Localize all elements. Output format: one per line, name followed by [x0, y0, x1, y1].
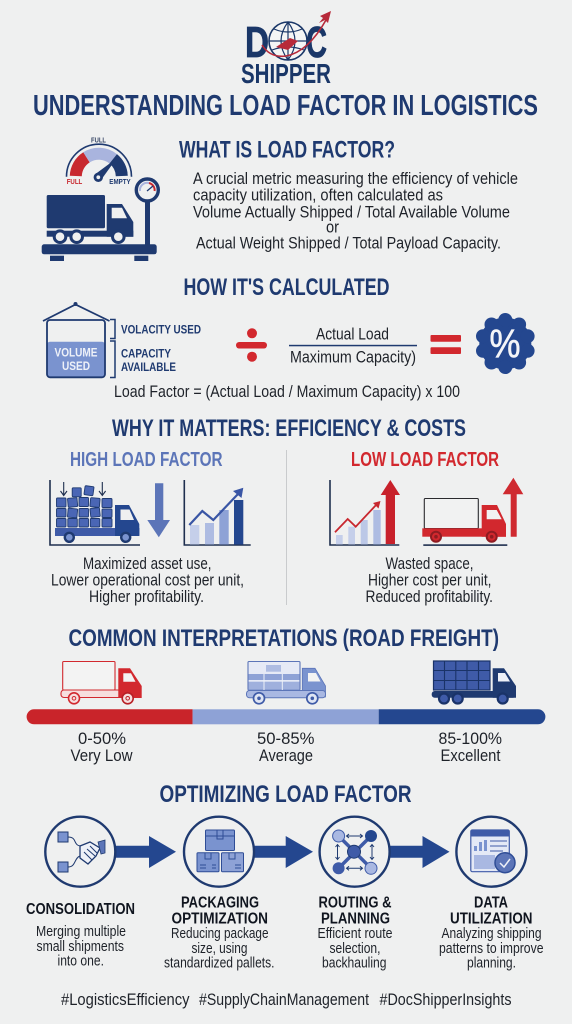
- heading: high load factor: HIGH LOAD FACTOR: [70, 449, 223, 471]
- label: 50-85% average: Average: [259, 746, 313, 765]
- fraction: Actual Load: [316, 326, 389, 344]
- text block: definition: or: [326, 218, 339, 236]
- step: data utilization: patterns to improve: [439, 941, 544, 957]
- label: 0-50% very low: [70, 729, 133, 765]
- heading: low load factor: LOW LOAD FACTOR: [351, 449, 499, 471]
- hashtags: #LogisticsEfficiency: [61, 991, 190, 1009]
- label: 50-85% average: [257, 729, 314, 765]
- gauge: FULL: [91, 136, 106, 144]
- text: low load drawbacks: [366, 555, 493, 606]
- arrow 3: [390, 836, 450, 868]
- label: 50-85% average: 50-85%: [257, 729, 314, 748]
- gauge: FULL: [67, 177, 83, 186]
- step: packaging optimization: Reducing package: [171, 926, 268, 942]
- label: 0-50% very low: Very Low: [70, 746, 133, 765]
- icon: equals sign: [430, 335, 461, 354]
- step: consolidation: into one.: [58, 954, 104, 970]
- hashtags: [61, 991, 512, 1009]
- arrow 1: [115, 836, 176, 868]
- icon: up arrow: [503, 478, 523, 537]
- icon: loaded truck: [50, 480, 140, 545]
- step: routing and planning: ROUTING &: [318, 894, 392, 912]
- text: high load benefits: [51, 555, 244, 606]
- panel: high load factor: [50, 449, 251, 606]
- heading: what is load factor: WHAT IS LOAD FACTOR?: [179, 136, 395, 164]
- icon: fully loaded truck, excellent: [432, 661, 516, 704]
- truck: [47, 195, 133, 242]
- text: low load drawbacks: Wasted space,: [386, 555, 474, 573]
- icon: consolidation handshake: [45, 817, 115, 887]
- icon: packaging boxes: [184, 817, 254, 887]
- text block: definition: [193, 170, 518, 252]
- gauge: EMPTY: [109, 177, 131, 186]
- icon: empty red truck: [422, 498, 507, 546]
- text block: definition: capacity utilization, often calculated as: [193, 186, 443, 204]
- step: data utilization: Analyzing shipping: [442, 926, 542, 942]
- icon: down arrow: [147, 483, 170, 537]
- step: data utilization: [439, 894, 544, 972]
- step: data utilization: DATA: [474, 894, 508, 912]
- icon: volume tank with brackets: AVAILABLE: [121, 360, 176, 374]
- step: data utilization: UTILIZATION: [450, 910, 532, 928]
- icon: volume tank with brackets: USED: [62, 359, 90, 373]
- text block: definition: A crucial metric measuring the efficiency of vehicle: [193, 170, 518, 188]
- label: 0-50% very low: 0-50%: [78, 729, 126, 748]
- logo: DocShipper: [241, 11, 331, 89]
- text: high load benefits: Maximized asset use,: [83, 555, 212, 573]
- text block: definition: Actual Weight Shipped / Total Payload Capacity.: [196, 234, 501, 252]
- chart: rising profitability: [184, 480, 251, 545]
- arrow 2: [254, 836, 313, 868]
- icon: percent badge: [476, 313, 535, 374]
- chart: rising cost: [330, 480, 400, 545]
- step: consolidation: [26, 901, 135, 970]
- step: packaging optimization: OPTIMIZATION: [172, 910, 268, 928]
- text block: definition: Volume Actually Shipped / Total Available Volume: [193, 204, 510, 222]
- text: low load drawbacks: Higher cost per unit,: [368, 572, 492, 590]
- hashtags: #SupplyChainManagement: [199, 991, 369, 1009]
- fraction: Maximum Capacity): [290, 348, 416, 366]
- icon: half-loaded truck, average: [246, 662, 326, 704]
- step: consolidation: CONSOLIDATION: [26, 901, 135, 918]
- text: high load benefits: Lower operational cost per unit,: [51, 572, 244, 590]
- step: routing and planning: Efficient route: [318, 926, 392, 942]
- step: routing and planning: selection,: [330, 941, 380, 957]
- step: consolidation: Merging multiple: [36, 924, 126, 940]
- label: 85-100% excellent: [438, 729, 502, 765]
- icon: routing network: [320, 817, 390, 887]
- hashtags: #DocShipperInsights: [380, 991, 512, 1009]
- step: data utilization: planning.: [467, 956, 516, 972]
- step: packaging optimization: standardized pallets.: [164, 956, 274, 972]
- heading: optimizing load factor: OPTIMIZING LOAD FACTOR: [160, 781, 412, 808]
- icon: red truck, very low: [61, 662, 142, 704]
- logo: DocShipper: D: [245, 18, 269, 67]
- step: packaging optimization: size, using: [192, 941, 248, 957]
- step: packaging optimization: [164, 894, 274, 972]
- icon: volume tank with brackets: CAPACITY: [121, 346, 171, 360]
- logo: DocShipper: SHIPPER: [241, 58, 331, 89]
- panel: low load factor: [330, 449, 523, 606]
- gauge: [66, 136, 132, 186]
- step: routing and planning: backhauling: [322, 956, 386, 972]
- icon: gauge over truck on scale: [42, 136, 158, 261]
- formula: Load Factor = (Actual Load / Maximum Capacity) x 100: [114, 383, 460, 401]
- step: packaging optimization: PACKAGING: [181, 894, 259, 912]
- icon: division sign: [236, 328, 267, 362]
- icon: percent badge: %: [490, 322, 520, 366]
- icon: volume tank with brackets: [43, 302, 201, 378]
- step: routing and planning: PLANNING: [321, 910, 390, 928]
- scale: [42, 179, 158, 261]
- scale bar: [27, 709, 545, 724]
- divider: [286, 450, 287, 605]
- icon: data dashboard: [456, 817, 526, 887]
- logo: DocShipper: C: [306, 18, 327, 67]
- icon: volume tank with brackets: VOLACITY USED: [121, 322, 201, 336]
- text: low load drawbacks: Reduced profitability.: [366, 588, 493, 606]
- step: routing and planning: [318, 894, 392, 972]
- step: consolidation: small shipments: [36, 939, 124, 955]
- heading: how it's calculated: HOW IT'S CALCULATED: [184, 274, 390, 301]
- label: 85-100% excellent: 85-100%: [438, 729, 502, 748]
- text: high load benefits: Higher profitability.: [89, 588, 204, 606]
- label: 85-100% excellent: Excellent: [440, 746, 501, 765]
- fraction: [289, 326, 417, 366]
- icon: volume tank with brackets: VOLUME: [54, 346, 98, 360]
